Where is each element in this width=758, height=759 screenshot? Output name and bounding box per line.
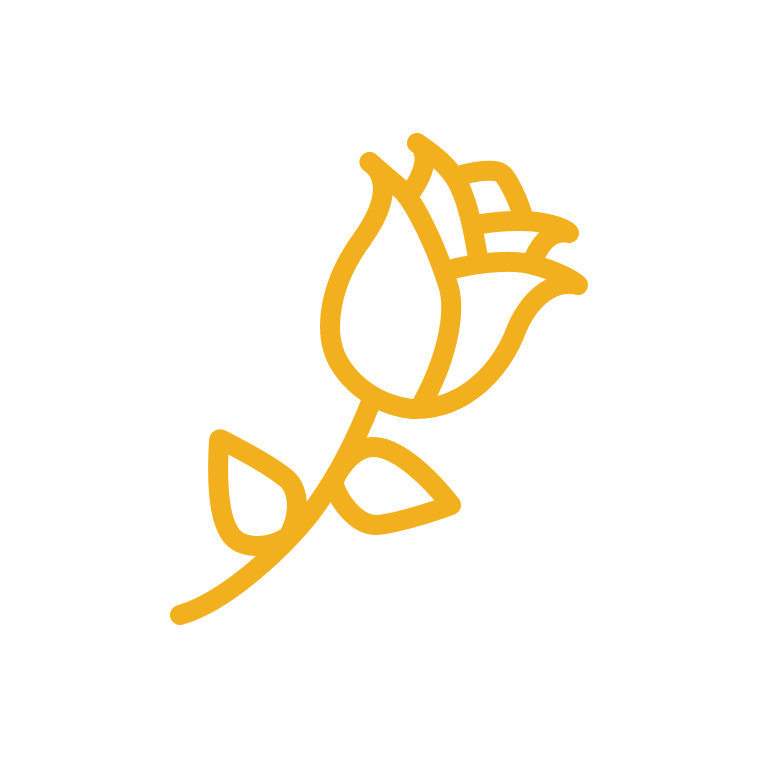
front petal of bud [330, 162, 415, 409]
second petal [417, 143, 478, 258]
second petal fold [411, 143, 425, 192]
lower right petal [415, 262, 578, 409]
top petal [458, 171, 522, 213]
left leaf [218, 439, 297, 546]
upper right petal band [475, 221, 569, 258]
front petal right edge [370, 162, 451, 402]
right leaf [333, 447, 451, 525]
stem [180, 402, 371, 615]
